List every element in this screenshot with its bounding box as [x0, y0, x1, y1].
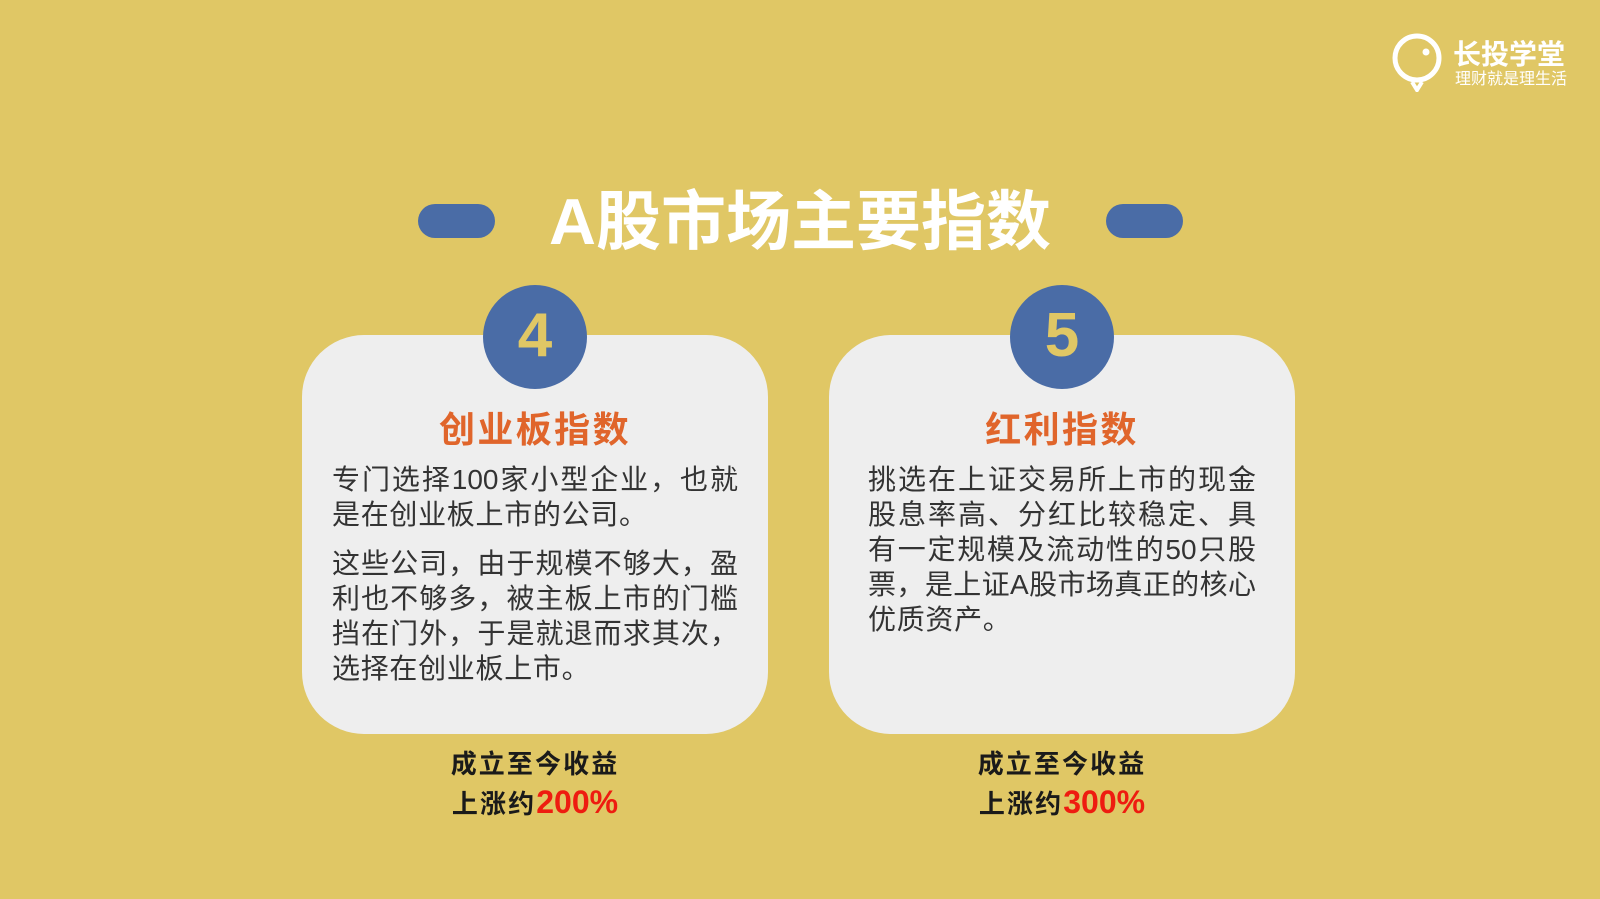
- text block: card 4 paragraph 2: [332, 548, 738, 684]
- text block: card 5 paragraph: 优质资产。: [868, 604, 1012, 635]
- decorative pill left: [418, 204, 495, 238]
- callout: card 4 return: 成立至今收益: [451, 749, 619, 779]
- number badge 4: [483, 285, 587, 389]
- callout: card 4 return: [451, 749, 619, 820]
- text block: card 4 paragraph 2: 挡在门外，于是就退而求其次，: [332, 618, 738, 649]
- number badge 5: 5: [1045, 301, 1079, 370]
- logo name: 长投学堂: [1453, 39, 1565, 70]
- number badge 4: 4: [518, 301, 552, 370]
- number badge 5: [1010, 285, 1114, 389]
- text block: card 5 paragraph: 有一定规模及流动性的50只股: [868, 534, 1256, 565]
- panel: card 4 background: [302, 335, 768, 734]
- heading: card 4: 创业板指数: [439, 409, 631, 450]
- text block: card 5 paragraph: [868, 464, 1256, 635]
- text block: card 4 paragraph 2: 这些公司，由于规模不够大，盈: [332, 548, 738, 579]
- logo: [1392, 34, 1567, 92]
- text block: card 4 paragraph 2: 选择在创业板上市。: [332, 653, 590, 684]
- text block: card 5 paragraph: 挑选在上证交易所上市的现金: [868, 464, 1256, 495]
- callout: card 5 return: 上涨约300%: [979, 784, 1145, 820]
- icon: light bulb ring: [1392, 34, 1442, 92]
- callout: card 4 return: 上涨约200%: [452, 784, 618, 820]
- text block: card 5 paragraph: 股息率高、分红比较稳定、具: [868, 499, 1256, 530]
- callout: card 5 return: 成立至今收益: [978, 749, 1146, 779]
- text block: card 5 paragraph: 票，是上证A股市场真正的核心: [868, 569, 1256, 600]
- text block: card 4 paragraph 1: [332, 464, 738, 530]
- text block: card 4 paragraph 1: 专门选择100家小型企业，也就: [332, 464, 738, 495]
- decorative pill right: [1106, 204, 1183, 238]
- title: A股市场主要指数: [549, 185, 1051, 258]
- logo slogan: 理财就是理生活: [1455, 71, 1567, 88]
- callout: card 5 return: [978, 749, 1146, 820]
- text block: card 4 paragraph 2: 利也不够多，被主板上市的门槛: [332, 583, 738, 614]
- panel: card 5 background: [829, 335, 1295, 734]
- heading: card 5: 红利指数: [985, 409, 1139, 450]
- text block: card 4 paragraph 1: 是在创业板上市的公司。: [332, 499, 648, 530]
